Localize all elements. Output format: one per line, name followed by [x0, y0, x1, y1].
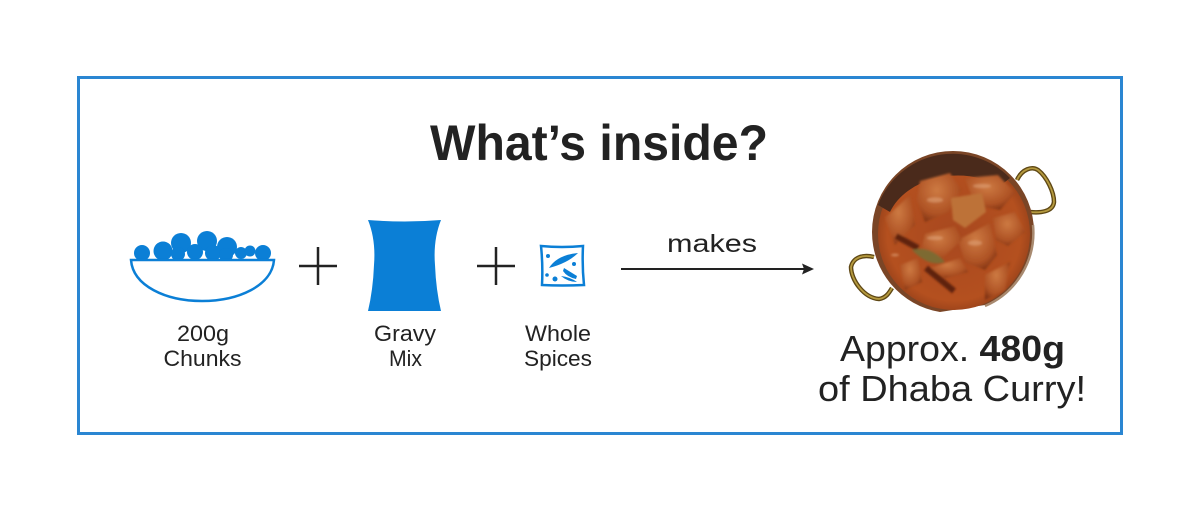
title: What’s inside? [430, 115, 768, 171]
label: gravy mix: Gravy [374, 321, 436, 346]
label: whole spices: Whole [525, 321, 591, 346]
icon: whole spices [541, 246, 584, 286]
icon: bowl of chunks [131, 231, 274, 301]
image: curry pan [851, 151, 1054, 312]
label: whole spices: Spices [524, 346, 592, 371]
food: meat chunks [885, 173, 1025, 300]
result text: Approx. 480g [840, 328, 1065, 369]
label: gravy mix [374, 321, 436, 371]
icon: gravy mix bag [368, 220, 441, 311]
icon: plus [299, 247, 337, 285]
result text [818, 328, 1086, 409]
food: bay leaf [912, 249, 945, 264]
panel: frame [78, 78, 1122, 434]
label: 200g chunks: 200g [177, 321, 229, 346]
food: highlights [891, 184, 991, 256]
label: 200g chunks [164, 321, 242, 371]
icon: plus [477, 247, 515, 285]
label: gravy mix: Mix [389, 346, 422, 371]
food: cinnamon sticks [896, 236, 954, 291]
label: whole spices [524, 321, 592, 371]
result text: of Dhaba Curry! [818, 368, 1086, 409]
arrow [621, 264, 814, 274]
label: makes: makes [667, 230, 757, 258]
label: 200g chunks: Chunks [164, 346, 242, 371]
